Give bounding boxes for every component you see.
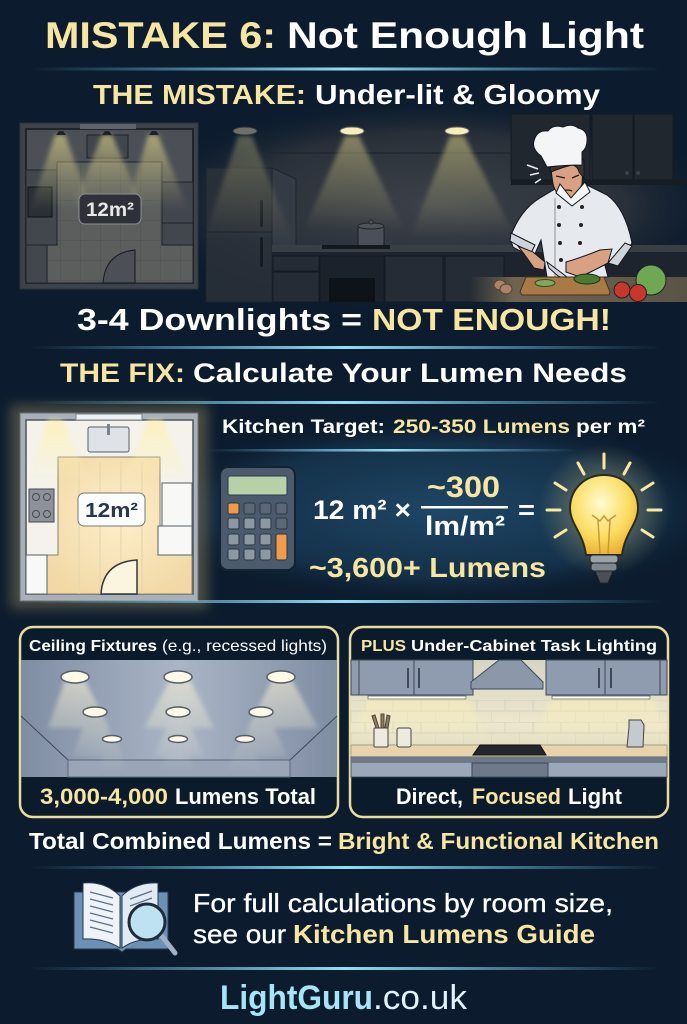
floor plan: gloomy xyxy=(20,123,198,289)
kettle xyxy=(627,720,644,747)
ceiling illustration xyxy=(21,660,337,777)
icon: book with magnifier xyxy=(74,883,175,953)
summary line: Total Combined Lumens = xyxy=(29,828,332,854)
downlights xyxy=(233,127,257,135)
text: guide reference: For full calculations by room size, xyxy=(193,888,613,918)
panel: under-cabinet lighting xyxy=(350,627,668,817)
counter and base units xyxy=(272,245,687,252)
light beams xyxy=(204,136,516,240)
text: kitchen target: per m² xyxy=(576,417,645,438)
door xyxy=(103,250,135,283)
footer logo xyxy=(220,979,468,1017)
equation xyxy=(309,471,546,583)
heading: Ceiling Fixtures xyxy=(29,638,157,655)
text: guide reference: see our xyxy=(193,919,286,949)
tomatoes and lettuce xyxy=(614,265,666,302)
panel: calculation xyxy=(10,405,687,609)
sink xyxy=(88,427,129,452)
caption: Focused xyxy=(472,784,561,809)
text: kitchen target: Kitchen Target: xyxy=(222,417,385,438)
forearms and hands xyxy=(518,246,612,277)
hat xyxy=(533,125,587,167)
caption xyxy=(40,784,316,809)
icon: light bulb xyxy=(538,444,670,583)
heading: the fix: THE FIX: xyxy=(60,358,185,388)
kitchen illustration xyxy=(351,660,667,777)
heading: the mistake: THE MISTAKE: xyxy=(93,79,306,110)
title: Not Enough Light xyxy=(287,15,644,56)
summary line xyxy=(29,828,659,854)
chef xyxy=(510,125,632,283)
collar xyxy=(556,182,590,206)
label: 12m²: 12m² xyxy=(85,500,138,522)
knife xyxy=(547,262,575,283)
label: 12m²: 12m² xyxy=(86,200,134,221)
heading: the fix: Calculate Your Lumen Needs xyxy=(193,358,627,388)
pot xyxy=(358,220,384,246)
heading xyxy=(29,638,327,655)
worktop xyxy=(470,277,687,302)
callout: not enough xyxy=(77,302,611,337)
caption: 3,000-4,000 xyxy=(40,784,168,809)
text: guide reference: Kitchen Lumens Guide xyxy=(293,919,595,949)
plan beams xyxy=(30,135,188,210)
label: 12m² xyxy=(78,493,145,526)
label: 12m² xyxy=(79,194,141,224)
panel: ceiling fixtures xyxy=(20,627,338,817)
text: kitchen target: 250-350 Lumens xyxy=(393,417,570,438)
text: kitchen target xyxy=(222,417,645,438)
equation: 12 m² × xyxy=(313,495,411,525)
equation: lm/m² xyxy=(425,511,505,541)
summary line: Bright & Functional Kitchen xyxy=(338,828,659,854)
heading: (e.g., recessed lights) xyxy=(162,638,327,655)
coat xyxy=(510,184,632,277)
icon: calculator xyxy=(220,467,295,570)
utensils and jar xyxy=(372,714,411,747)
panel: gloomy kitchen scene xyxy=(130,95,687,315)
equation: = xyxy=(518,495,535,525)
footer logo: LightGuru xyxy=(220,979,373,1017)
caption xyxy=(396,784,623,809)
hob xyxy=(28,187,52,217)
fridge xyxy=(206,168,296,302)
eggs xyxy=(494,280,512,294)
callout: not enough: 3-4 Downlights = xyxy=(77,302,362,337)
callout: not enough: NOT ENOUGH! xyxy=(372,302,611,337)
plan fixtures xyxy=(56,131,159,135)
motion marks xyxy=(527,165,541,183)
door xyxy=(101,560,137,594)
heading: the mistake xyxy=(93,79,600,110)
face xyxy=(551,160,583,200)
cutting board xyxy=(520,277,610,295)
text: guide reference xyxy=(193,888,613,949)
equation: ~300 xyxy=(427,471,500,504)
heading: Under-Cabinet Task Lighting xyxy=(411,638,657,655)
wall cabinets xyxy=(511,114,673,180)
title xyxy=(45,15,644,56)
heading: PLUS xyxy=(361,638,406,655)
heading: the mistake: Under-lit & Gloomy xyxy=(315,79,600,110)
caption: Lumens Total xyxy=(175,784,316,809)
heading: the fix xyxy=(60,358,627,388)
footer logo: .co.uk xyxy=(373,979,468,1017)
caption: Direct, xyxy=(396,784,463,809)
floor plan: bright xyxy=(10,405,208,609)
caption: Light xyxy=(568,784,623,809)
equation: ~3,600+ Lumens xyxy=(309,552,546,583)
hob xyxy=(473,745,546,755)
sink xyxy=(87,135,128,158)
title: MISTAKE 6: xyxy=(45,15,276,56)
